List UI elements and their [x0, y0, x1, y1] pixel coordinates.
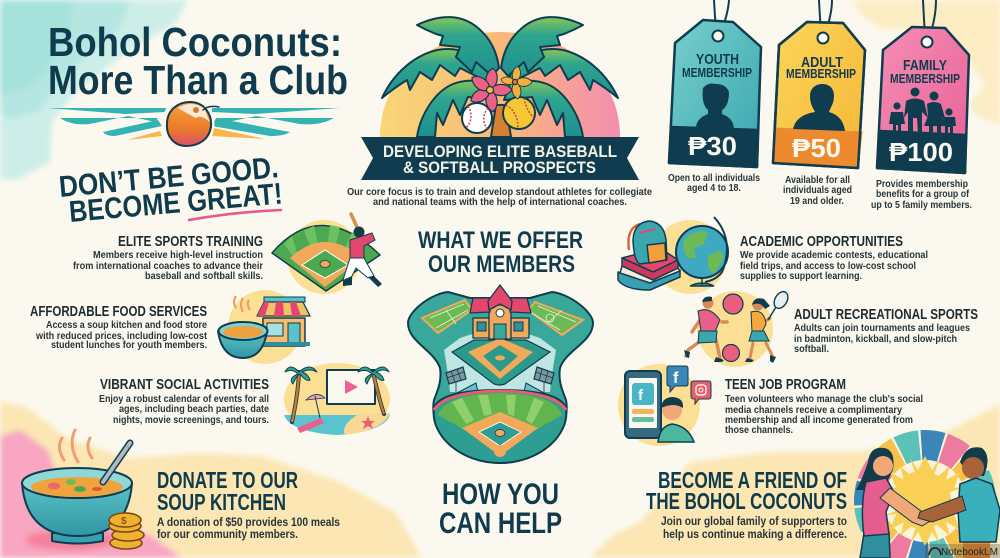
membership caption: youth: Open to all individuals: [668, 172, 760, 184]
offer: adult recreational sports: Adults can join tournaments and leagues: [794, 322, 970, 334]
icon: family silhouette: [889, 88, 956, 135]
icon: adult sports players: [684, 289, 791, 367]
kickball: [723, 294, 743, 314]
upper diamond: [452, 340, 550, 385]
offer: teen job program: TEEN JOB PROGRAM: [725, 377, 846, 393]
heading: what we offer: WHAT WE OFFER: [418, 227, 583, 254]
offer: vibrant social activities: VIBRANT SOCIAL ACTIVITIES: [100, 377, 269, 393]
left field: [422, 300, 472, 333]
heading: how you can help: CAN HELP: [439, 507, 562, 540]
title: [48, 19, 348, 103]
call to action: friend: [646, 467, 847, 541]
offer: academic opportunities: ACADEMIC OPPORTUNITIES: [740, 234, 903, 250]
banner: developing prospects: & SOFTBALL PROSPECTS: [403, 158, 596, 177]
backpack: [628, 221, 667, 264]
banner: developing prospects: DEVELOPING ELITE BASEBALL: [383, 142, 617, 161]
offer: vibrant social activities: Enjoy a robust calendar of events for all: [99, 393, 269, 405]
icon: soup bowl and coins: $: [121, 516, 127, 527]
offer: teen job program: those channels.: [725, 424, 793, 436]
membership tag: family: FAMILY: [903, 57, 947, 74]
offer: teen job program: [725, 377, 923, 436]
call to action: friend: THE BOHOL COCONUTS: [646, 488, 847, 514]
palm trunk: [491, 105, 511, 137]
icon: handshake over sun: [854, 430, 1000, 558]
heading: what we offer: OUR MEMBERS: [428, 251, 575, 278]
core focus text: and national teams with the help of international coaches.: [373, 196, 627, 208]
icon: instagram bubble: [691, 381, 711, 404]
offer: academic opportunities: We provide academic contests, educational: [740, 249, 928, 261]
icon: yellow flower: [500, 66, 532, 100]
title: Bohol Coconuts:: [48, 19, 342, 65]
membership caption: adult: [783, 174, 852, 207]
heading: what we offer: [418, 227, 583, 278]
icon: pink flower: [468, 67, 512, 113]
offer: adult recreational sports: in badminton, kickball, and slow-pitch: [794, 333, 957, 345]
offer: adult recreational sports: [794, 307, 978, 355]
male player: [684, 297, 727, 362]
icon: beach movie night: [284, 363, 390, 435]
slogan: BECOME GREAT!: [68, 177, 284, 229]
icon: campus map with fields: [408, 285, 593, 463]
offer: affordable food services: [30, 304, 207, 351]
membership caption: youth: aged 4 to 18.: [687, 182, 741, 194]
icon: facebook bubble: f: [673, 370, 679, 387]
membership tag: youth: YOUTH: [696, 51, 739, 68]
offer: elite sports training: from international coaches to advance their: [73, 260, 263, 272]
membership tag: family: ₱100: [889, 137, 953, 167]
icon: soup bowl and coins: [22, 430, 144, 549]
membership tag: youth: [669, 0, 761, 167]
offer: vibrant social activities: ages, including beach parties, date: [119, 403, 269, 415]
female player: [745, 298, 776, 363]
food store: [257, 297, 310, 346]
offer: elite sports training: baseball and softball skills.: [145, 270, 263, 282]
membership caption: adult: 19 and older.: [790, 195, 844, 207]
phone: [625, 371, 661, 438]
clubhouse: [470, 285, 531, 339]
membership tag: adult: ₱50: [792, 133, 841, 163]
icon: backpack, books and globe: [618, 217, 728, 294]
membership caption: family: up to 5 family members.: [871, 199, 972, 211]
membership tag: youth: ₱30: [688, 131, 737, 161]
call to action: donate: A donation of $50 provides 100 meals: [157, 517, 340, 529]
slogan: [58, 151, 284, 229]
membership caption: family: benefits for a group of: [876, 188, 969, 200]
call to action: friend: help us continue making a difference.: [663, 529, 847, 541]
offer: teen job program: media channels receive a complimentary: [725, 404, 902, 416]
membership caption: family: Provides membership: [876, 178, 968, 190]
offer: affordable food services: AFFORDABLE FOOD SERVICES: [30, 304, 207, 320]
icon: adult silhouette: [793, 84, 845, 131]
offer: academic opportunities: [740, 234, 928, 282]
membership caption: family: [871, 178, 972, 211]
offer: academic opportunities: field trips, and access to low-cost school: [740, 260, 916, 272]
membership caption: adult: Available for all: [785, 174, 850, 186]
offer: vibrant social activities: nights, movie screenings, and tours.: [113, 414, 269, 426]
books: [618, 248, 680, 290]
call to action: friend: BECOME A FRIEND OF: [658, 467, 847, 493]
membership tag: family: MEMBERSHIP: [890, 71, 960, 86]
globe: [676, 226, 728, 278]
soup bowl: [218, 322, 268, 358]
membership tag: youth: MEMBERSHIP: [682, 65, 752, 80]
right field: [528, 302, 583, 335]
call to action: friend: Join our global family of supporters to: [661, 516, 847, 528]
offer: affordable food services: with reduced prices, including low-cost: [35, 330, 207, 342]
man: [918, 447, 1000, 558]
membership caption: adult: individuals aged: [783, 184, 852, 196]
call to action: donate: [157, 467, 340, 541]
banner: developing prospects: [361, 137, 639, 180]
icon: coconut with wings: [48, 100, 340, 148]
offer: affordable food services: student lunches for youth members.: [51, 339, 207, 351]
heading: how you can help: [439, 478, 562, 540]
membership tag: family: [877, 0, 969, 173]
icon: baseball field and batter: [272, 214, 382, 294]
woman: [856, 448, 932, 558]
teen: [658, 424, 694, 442]
offer: adult recreational sports: softball.: [794, 343, 829, 355]
offer: teen job program: Teen volunteers who manage the club's social: [725, 393, 923, 405]
spoon: [103, 443, 130, 482]
core focus text: [347, 186, 652, 208]
membership tag: adult: [773, 0, 865, 168]
racket: [768, 289, 791, 320]
call to action: donate: DONATE TO OUR: [157, 467, 298, 493]
batter: [343, 214, 382, 287]
icon: soup bowl and food store: [218, 290, 310, 364]
heading: how you can help: HOW YOU: [442, 478, 559, 511]
icon: teen with phone and social media: [618, 364, 711, 446]
slogan: DON’T BE GOOD.: [58, 151, 280, 204]
icon: youth silhouette: [696, 84, 734, 128]
coins: [109, 513, 144, 549]
lower stadium: [436, 383, 564, 412]
palm tree emblem: [380, 17, 620, 137]
membership tag: adult: MEMBERSHIP: [786, 66, 856, 81]
offer: vibrant social activities: [99, 377, 269, 426]
floodlights: [446, 367, 554, 392]
badge: NotebookLM: [925, 544, 1000, 558]
offer: elite sports training: ELITE SPORTS TRAINING: [118, 234, 263, 250]
membership tag: adult: ADULT: [801, 54, 843, 71]
palm fronds: [382, 17, 618, 137]
offer: elite sports training: Members receive high-level instruction: [93, 249, 263, 261]
call to action: donate: SOUP KITCHEN: [157, 489, 286, 515]
offer: teen job program: membership and all income generated from: [725, 414, 913, 426]
offer: elite sports training: [73, 234, 263, 282]
icon: teen with phone and social media: f: [638, 387, 644, 404]
offer: affordable food services: Access a soup kitchen and food store: [46, 319, 207, 331]
icon: softball: [503, 97, 535, 129]
call to action: donate: for our community members.: [157, 529, 298, 541]
badge: NotebookLM: NotebookLM: [941, 546, 998, 558]
title: More Than a Club: [48, 57, 348, 103]
membership caption: youth: [668, 172, 760, 194]
offer: academic opportunities: supplies to support learning.: [740, 270, 862, 282]
icon: baseball: [462, 103, 492, 133]
core focus text: Our core focus is to train and develop standout athletes for collegiate: [347, 186, 652, 198]
